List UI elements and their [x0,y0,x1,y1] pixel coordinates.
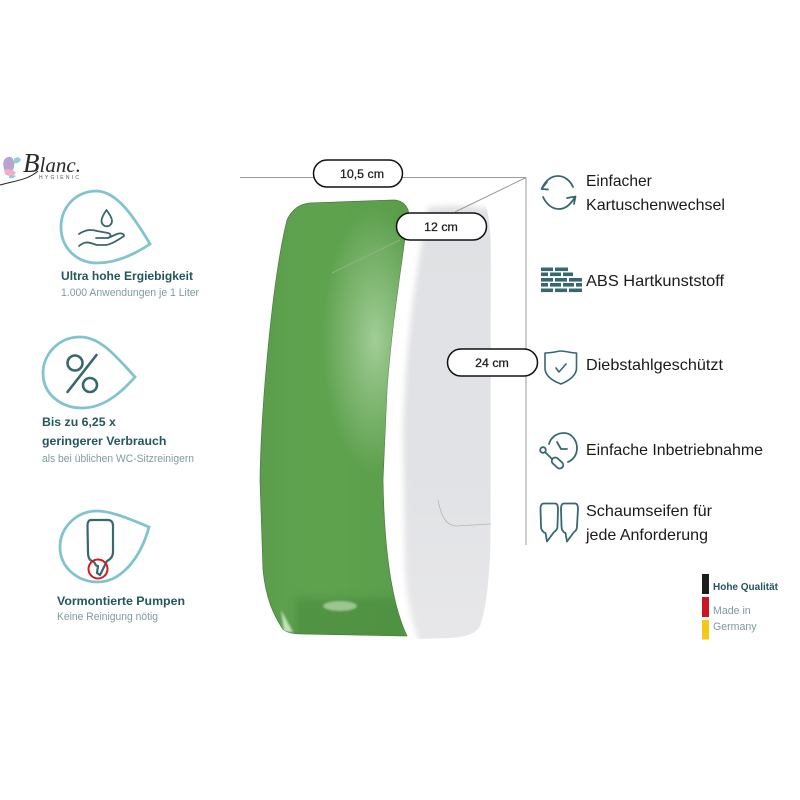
feature: Einfacher Kartuschenwechsel: Kartuschenwechsel [586,197,725,214]
badge text: Made in [713,605,751,617]
heading: Bis zu 6,25 x [42,415,116,429]
dispenser green shading [280,221,404,636]
feature: Schaumseifen für jede Anforderung [540,503,712,544]
icon: bricks [541,268,582,292]
feature: Ultra hohe Ergiebigkeit [61,191,199,299]
logo: Blanc Hygienic [0,148,81,185]
feature: Einfache Inbetriebnahme [540,433,763,470]
logo tagline: HYGIENIC [39,175,80,181]
dispenser window latch [438,500,491,526]
logo swoosh [0,171,38,185]
dimension label: 12 cm [396,213,486,240]
dispenser green highlight [328,221,404,460]
feature: Vormontierte Pumpen [57,511,185,623]
icon: cartridge drop [60,511,149,582]
dimension label: 10,5 cm [314,160,402,187]
dispenser lower-left glint [281,610,293,632]
dimension label: 12 cm: 12 cm [424,220,458,234]
badge: Made in Germany [702,574,779,640]
icon: percent drop [43,337,135,408]
icon: two cartridges [540,504,578,542]
dispenser bottom reflection [323,601,357,611]
flag bars [702,574,709,640]
feature: ABS Hartkunststoff [541,268,725,292]
subtext: als bei üblichen WC-Sitzreinigern [42,453,194,465]
dimension label: 24 cm [448,349,538,376]
text: Einfacher [586,173,652,190]
dimension lines [240,178,526,545]
icon: shield check [545,351,576,384]
dimension label: 24 cm: 24 cm [475,356,509,370]
dispenser bottom shadow [296,598,404,636]
text: Einfache Inbetriebnahme [586,442,763,459]
feature: Schaumseifen für jede Anforderung: jede Anforderung [585,527,708,544]
badge heading: Hohe Qualität [713,582,779,593]
dispenser grey side [402,204,491,639]
logo butterfly [3,157,21,178]
logo wordmark: Blanc. [23,148,81,178]
text: Diebstahlgeschützt [586,357,724,374]
dispenser white body [258,196,491,639]
product: dispenser [260,200,491,639]
badge: Made in Germany: Germany [713,621,757,633]
feature: Einfacher Kartuschenwechsel [542,173,725,214]
subtext: Keine Reinigung nötig [57,611,158,623]
subtext: 1.000 Anwendungen je 1 Liter [61,287,199,299]
heading: Vormontierte Pumpen [57,594,185,608]
feature: Bis zu 6,25 x [42,337,194,465]
feature: Diebstahlgeschützt [545,351,724,384]
icon: drop with hand [61,191,150,263]
text: Schaumseifen für [586,503,712,520]
heading: Ultra hohe Ergiebigkeit [61,269,193,283]
dimension label: 10,5 cm: 10,5 cm [340,167,384,181]
dispenser green window [260,200,408,636]
icon: clock and screwdriver [540,433,577,470]
feature: Bis zu 6,25 x: geringerer Verbrauch [42,434,166,448]
text: ABS Hartkunststoff [586,273,725,290]
icon: exchange arrows [542,176,576,209]
